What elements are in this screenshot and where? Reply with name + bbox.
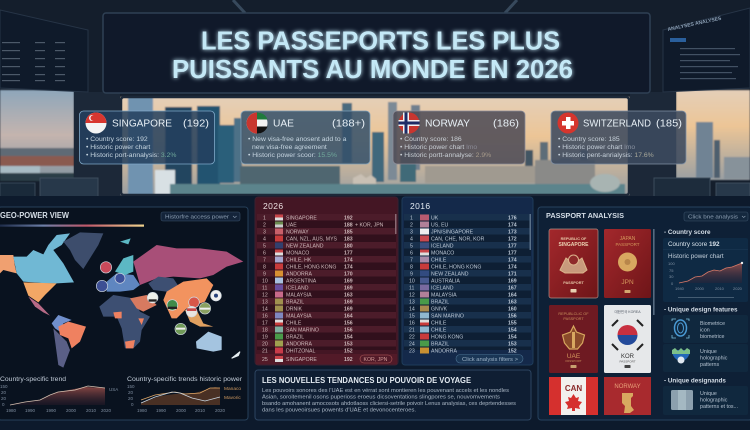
window frame xyxy=(74,92,676,197)
chart: country-specific trend: 150 xyxy=(0,384,8,389)
passport: Korea: 대한민국 KOREA xyxy=(614,309,641,314)
dropdown: Historfre access power xyxy=(165,214,229,220)
passport: UAE: REPUBLCLIC OF xyxy=(558,312,589,316)
icon: Norway flag xyxy=(398,112,420,134)
chart: country-specific trends historic power: 1980 xyxy=(137,408,148,413)
2026 rows: 169 xyxy=(344,278,353,284)
2016 rows: 13 xyxy=(409,300,415,306)
2016 rows: 173 xyxy=(508,230,517,236)
panel: geo-power view xyxy=(0,207,248,420)
2016 rows: 24 xyxy=(409,342,415,348)
passport: Singapore xyxy=(549,229,598,298)
2016 rows: ICELAND xyxy=(431,244,454,250)
2026 rows: MALAYSIA xyxy=(286,314,312,320)
2016 rows: 14 xyxy=(409,306,415,312)
chart: country-specific trend: Country-specific trend xyxy=(0,376,66,383)
body text xyxy=(262,388,516,414)
passport: Canada: CAN xyxy=(565,384,582,393)
2026 rows: 19 xyxy=(262,334,268,340)
2026 rows: 5 xyxy=(263,244,266,250)
chart: country-specific trends historic power: 2000 xyxy=(176,408,187,413)
2026 rows: 14 xyxy=(262,306,268,312)
2026 rows: 2 xyxy=(263,222,266,228)
left window view xyxy=(0,90,74,181)
heading: unique design features: - Unique design features xyxy=(664,306,738,314)
2016 rows: 7 xyxy=(410,258,413,264)
heading: GEO-POWER VIEW xyxy=(0,211,70,220)
chart box: country score: 100 xyxy=(668,261,675,266)
2016 rows: 154 xyxy=(508,334,517,340)
icon: Switzerland flag xyxy=(558,112,578,134)
chart box: country score: 75 xyxy=(669,268,674,273)
2026 rows: DHITZONAL xyxy=(286,348,316,354)
feature: holographic sample xyxy=(663,386,748,415)
card: Norway xyxy=(393,111,525,164)
highlighted bottom row xyxy=(256,354,397,364)
chart: country-specific trends historic power: 1990 xyxy=(156,408,167,413)
passport: Korea xyxy=(604,305,651,373)
passport: Korea: PASSPORT xyxy=(619,360,636,364)
2016 rows: 169 xyxy=(508,278,517,284)
title: LES PASSEPORTS LES PLUS xyxy=(201,26,560,56)
highlighted bottom row: 25 xyxy=(262,357,268,363)
2016 rows: 174 xyxy=(508,264,517,270)
chart: country-specific trend: 2020 xyxy=(101,408,112,413)
2016 rows: CHILE xyxy=(431,320,447,326)
2026 rows: SAN MARINO xyxy=(286,328,319,334)
title: PUISSANTS AU MONDE EN 2026 xyxy=(172,54,573,84)
passport: UAE: PASSPORT xyxy=(563,317,584,321)
2016 rows: 1 xyxy=(410,216,413,222)
small desk monitors left xyxy=(0,178,98,197)
heading: unique designands: - Unique designands xyxy=(664,378,726,384)
chart: country-specific trends historic power: Mavoric xyxy=(224,395,241,401)
2016 rows: 153 xyxy=(508,342,517,348)
dropdown: Click bne analysis xyxy=(688,214,738,220)
2016 rows: 6 xyxy=(410,250,413,256)
card: Norway: NORWAY xyxy=(425,118,470,130)
2016 rows: 163 xyxy=(508,300,517,306)
2016 rows: 12 xyxy=(409,292,415,298)
right info screen xyxy=(663,8,750,92)
chart box: country score: 30 xyxy=(669,274,674,279)
card: Switzerland: • Historic pent-anrialysis: 17.6% xyxy=(558,152,654,159)
2026 rows: 163 xyxy=(344,292,353,298)
2026 rows: SINGAPORE xyxy=(286,216,317,222)
passport: UAE xyxy=(549,305,598,373)
passport: Norway xyxy=(604,377,651,415)
passport: Canada xyxy=(549,377,598,415)
panel: travel power trends xyxy=(255,370,531,420)
right window view xyxy=(676,90,750,180)
2026 rows: 185 xyxy=(344,230,353,236)
2016 rows: 3 xyxy=(410,230,413,236)
2026 rows: 7 xyxy=(263,258,266,264)
chart: country-specific trends historic power: Country-specific trends historic power xyxy=(127,376,243,383)
chart box: country score: 2000 xyxy=(695,286,705,291)
2026 rows: CHILE, HONG KONG xyxy=(286,264,336,270)
icon: UAE flag xyxy=(246,112,268,134)
2016 rows: ICELAND xyxy=(431,286,454,292)
2016 rows: NEW ZEALAND xyxy=(431,272,469,278)
2016 rows: 177 xyxy=(508,250,517,256)
passport: Singapore: SINGAPORE xyxy=(558,242,589,248)
feature: holographic sample: holographic xyxy=(700,398,728,404)
chart: country-specific trend: 0 xyxy=(2,402,5,407)
chart box: country score: Historic power chart xyxy=(668,253,724,260)
feature: biometric icon: icon xyxy=(700,328,710,334)
2026 rows: 174 xyxy=(344,258,353,264)
2016 rows: CHILE xyxy=(431,258,447,264)
2016 rows: ANDORRA xyxy=(431,348,457,354)
card: UAE: (188+) xyxy=(332,118,365,130)
feature: biometric icon: biometrice xyxy=(700,334,724,340)
2026 rows: 177 xyxy=(344,250,353,256)
2016 rows: UK xyxy=(431,216,439,222)
2026 rows: 192 xyxy=(344,216,353,222)
left info screen xyxy=(0,10,88,92)
chart: country-specific trend: 1980 xyxy=(6,408,17,413)
passport: UAE: UAE xyxy=(567,353,581,360)
feature: holographic patterns xyxy=(663,344,748,372)
chart box: country score: 2020 xyxy=(733,286,743,291)
panel: 2026 ranking xyxy=(255,197,398,365)
passport: Korea: KOR xyxy=(621,354,635,360)
panel: 2016 ranking xyxy=(402,197,533,365)
dropdown xyxy=(684,212,748,221)
chart: country-specific trends historic power: 150 xyxy=(127,384,135,389)
card: Switzerland: (185) xyxy=(656,118,682,130)
chart box: country score xyxy=(663,238,748,302)
2026 rows: 152 xyxy=(344,348,353,354)
2016 rows: 164 xyxy=(508,292,517,298)
card: UAE: • New visa-free anosent add to a xyxy=(248,136,347,143)
2016 rows: 154 xyxy=(508,328,517,334)
2026 rows: 16 xyxy=(262,314,268,320)
passport: Japan xyxy=(604,229,651,298)
card: UAE xyxy=(241,111,370,164)
2026 rows: MALAYSIA xyxy=(286,292,312,298)
2016 rows: 174 xyxy=(508,222,517,228)
2026 rows: 12 xyxy=(262,292,268,298)
2016 rows: BRAZIL xyxy=(431,342,449,348)
2016 rows: SAN MARINO xyxy=(431,314,464,320)
2016 rows: MALAYSIA xyxy=(431,292,457,298)
passport: UAE: PASSPORT xyxy=(565,359,582,363)
passport: Singapore: PASSPORT xyxy=(563,281,584,285)
chart: country-specific trends historic power: Manaco xyxy=(224,386,241,392)
chart box: country score: 1940 xyxy=(675,286,685,291)
2016 rows: AUSTRALIA xyxy=(431,278,460,284)
chart: country-specific trend: 20 xyxy=(1,390,7,395)
2016 rows: 10 xyxy=(409,278,415,284)
2026 rows: 21 xyxy=(262,348,268,354)
chart: country-specific trends historic power: 20 xyxy=(128,396,134,401)
heading 2026: 2026 xyxy=(263,201,284,211)
2016 rows: 21 xyxy=(409,328,415,334)
card: Singapore: • Historic port-annalysis: 3.2% xyxy=(86,152,176,159)
card: Norway: (186) xyxy=(493,118,519,130)
chart: country-specific trends historic power: 2010 xyxy=(195,408,206,413)
passport: Norway: NORWAY xyxy=(614,384,641,390)
2026 rows: ICELAND xyxy=(286,286,309,292)
chart: country-specific trend: 1990 xyxy=(46,408,57,413)
2026 rows: 154 xyxy=(344,334,353,340)
2026 rows: 169 xyxy=(344,306,353,312)
2016 rows: CHILE, HONG KONG xyxy=(431,264,481,270)
2026 rows: NORWAY xyxy=(286,230,309,236)
card: UAE: UAE xyxy=(273,118,294,130)
2026 rows: 20 xyxy=(262,342,268,348)
chart: country-specific trend: 1990 xyxy=(25,408,36,413)
2016 rows: US, EU xyxy=(431,222,449,228)
body text: Asian, soroitemenil osons puperioss eroeus dicsoventations slingpores se, nouvomvements xyxy=(262,394,500,400)
2016 rows: MONACO xyxy=(431,250,454,256)
card: Switzerland: • Country score: 185 xyxy=(558,136,620,143)
2016 rows: 8 xyxy=(410,264,413,270)
passport: Japan: JPN xyxy=(621,279,634,286)
2026 rows: 18 xyxy=(262,328,268,334)
2016 rows: 9 xyxy=(410,272,413,278)
2026 rows: 156 xyxy=(344,320,353,326)
lower dashboard base xyxy=(0,196,750,430)
chart: country-specific trend xyxy=(0,376,118,413)
card: Switzerland: SWITZERLAND xyxy=(583,118,651,130)
2026 rows: 188 xyxy=(344,222,353,228)
heading: LES NOUVELLES TENDANCES DU POUVOIR DE VOYAGE xyxy=(262,376,471,385)
feature: biometric icon xyxy=(663,315,748,343)
panel: passport analysis xyxy=(538,207,750,420)
2016 rows: 16 xyxy=(409,320,415,326)
2026 rows: CHILE xyxy=(286,320,302,326)
2016 rows: 177 xyxy=(508,244,517,250)
2016 rows: 160 xyxy=(508,306,517,312)
body text: Les pouvoirs sonores des l'UAE est en vérrat sont montieren les pouvenant accels et les nondles xyxy=(262,388,509,394)
card: UAE: new visa-free agreement xyxy=(252,144,327,151)
2026 rows: ARGENTINA xyxy=(286,278,317,284)
card: Norway: • Historic portt-annalyse: 2.9% xyxy=(400,152,491,159)
passport: Japan: PASSPORT xyxy=(615,242,640,247)
heading: country score: - Country score xyxy=(664,229,711,236)
2026 rows: CAN, NZL, AUS, MYS xyxy=(286,236,338,242)
2026 rows: UAE xyxy=(286,222,297,228)
legend scale xyxy=(0,224,144,227)
2016 rows: JPN/SINGAPORE xyxy=(431,230,474,236)
2026 rows: ANDORRA xyxy=(286,272,312,278)
card: UAE: • Historic power scoor: 15.5% xyxy=(248,152,337,159)
2016 rows: 22 xyxy=(409,334,415,340)
2026 rows: MONACO xyxy=(286,250,309,256)
chart: country-specific trends historic power: 0 xyxy=(131,402,134,407)
central window with skyline xyxy=(120,97,630,195)
2016 rows: 174 xyxy=(508,258,517,264)
card: Singapore: (192) xyxy=(183,118,209,130)
2026 rows: CHILE, HK xyxy=(286,258,312,264)
heading 2016: 2016 xyxy=(410,201,431,211)
feature: holographic patterns: Unique xyxy=(700,349,717,355)
chart: country-specific trend: 2000 xyxy=(66,408,77,413)
2016 rows: 152 xyxy=(508,348,517,354)
2016 rows xyxy=(409,214,517,354)
2016 rows: 155 xyxy=(508,320,517,326)
2026 rows: 10 xyxy=(262,278,268,284)
chart: country-specific trend: 20 xyxy=(1,396,7,401)
dropdown xyxy=(161,212,240,221)
2026 rows: BRAZIL xyxy=(286,300,304,306)
2026 rows: 180 xyxy=(344,244,353,250)
2016 rows: 23 xyxy=(409,348,415,354)
2026 rows: 9 xyxy=(263,272,266,278)
passport: Singapore: REPUBLIC OF xyxy=(561,237,587,241)
2016 rows: 4 xyxy=(410,236,413,242)
card: Norway: • Historic power chart lmo xyxy=(400,144,477,151)
chart box: country score: 0 xyxy=(671,281,674,286)
highlighted bottom row: KOR, JPN xyxy=(364,357,388,363)
2026 rows: DRNIK xyxy=(286,306,303,312)
2026 rows: 183 xyxy=(344,236,353,242)
chart: country-specific trends historic power: 20 xyxy=(128,390,134,395)
2026 rows: NEW ZEALAND xyxy=(286,244,324,250)
highlighted bottom row: SINGAPORE xyxy=(286,357,317,363)
2016 rows: GNIVK xyxy=(431,306,448,312)
ceiling struts xyxy=(233,0,517,13)
2026 rows: 11 xyxy=(262,286,267,292)
2026 rows: 1 xyxy=(263,216,266,222)
chart box: country score: 2010 xyxy=(715,286,725,291)
filter pill: Click analysis filters > xyxy=(462,357,518,363)
2026 rows: ANDORRA xyxy=(286,342,312,348)
2016 rows: 15 xyxy=(409,314,415,320)
2026 rows: 6 xyxy=(263,250,266,256)
feature: holographic sample: Unique xyxy=(700,391,717,397)
feature: holographic patterns: patterns xyxy=(700,362,719,368)
2016 rows: CHILE xyxy=(431,328,447,334)
feature: holographic patterns: holographic xyxy=(700,356,728,362)
2026 rows: 169 xyxy=(344,300,353,306)
2026 rows: 164 xyxy=(344,314,353,320)
card: Singapore: SINGAPORE xyxy=(112,118,172,130)
title xyxy=(172,26,573,84)
body text: dans les pouveoirsues powents d'UAE et devonocenteroes. xyxy=(262,408,416,414)
2026 rows: 170 xyxy=(344,272,353,278)
chart: country-specific trends historic power: 2020 xyxy=(215,408,226,413)
2016 rows: 156 xyxy=(508,314,517,320)
card: Singapore: • Country score: 192 xyxy=(86,136,148,143)
card: Norway: • Country score: 186 xyxy=(400,136,462,143)
chart: country-specific trends historic power xyxy=(127,376,243,413)
chart: country-specific trend: USA xyxy=(109,387,118,392)
2026 rows: + KOR, JPN xyxy=(355,222,384,228)
2026 rows: BRAZIL xyxy=(286,334,304,340)
card: Singapore: • Historic power chart xyxy=(86,144,150,151)
2026 rows: 156 xyxy=(344,328,353,334)
2026 rows: 8 xyxy=(263,264,266,270)
2016 rows: BRAZIL xyxy=(431,300,449,306)
feature: holographic sample: patterns et tos... xyxy=(700,404,738,410)
2026 rows: 169 xyxy=(344,286,353,292)
filter pill xyxy=(456,354,523,363)
passport list scrollbar xyxy=(653,229,655,315)
card: Switzerland: • Historic power chart lmo xyxy=(558,144,635,151)
icon: Singapore flag xyxy=(86,112,106,134)
2016 rows: 11 xyxy=(409,286,414,292)
2016 rows: CAN, CHE, NOR, KOR xyxy=(431,236,485,242)
2026 rows: 153 xyxy=(344,342,353,348)
2016 rows: 171 xyxy=(508,272,517,278)
2026 rows: 174 xyxy=(344,264,353,270)
chart: country-specific trend: 2010 xyxy=(86,408,97,413)
feature: biometric icon: Biometrice xyxy=(700,321,725,327)
card: Switzerland xyxy=(551,111,686,164)
right info screen: ANALYSES ANALYSES xyxy=(667,16,723,33)
2026 rows: 17 xyxy=(262,320,268,326)
highlighted bottom row: 192 xyxy=(344,357,353,363)
map flag markers xyxy=(96,262,221,335)
2016 rows: 167 xyxy=(508,286,517,292)
2026 rows: 4 xyxy=(263,236,266,242)
2026 rows: 13 xyxy=(262,300,268,306)
2026 rows xyxy=(262,214,384,354)
chart box: country score: Country score 192 xyxy=(668,241,720,248)
2016 rows: 172 xyxy=(508,236,517,242)
title board xyxy=(103,13,650,93)
2016 rows: HONG KONG xyxy=(431,334,463,340)
2026 rows: 3 xyxy=(263,230,266,236)
body text: bsando amohanent amocosots ahdotlaoss cliciersi-setrile poivoir Lenus analysias, ces deprtendesses xyxy=(262,401,516,407)
2016 rows: 5 xyxy=(410,244,413,250)
passport: Japan: JAPAN xyxy=(620,236,636,242)
world map xyxy=(0,232,243,368)
small desk monitors right xyxy=(654,178,750,197)
2016 rows: 176 xyxy=(508,216,517,222)
heading: PASSPORT ANALYSIS xyxy=(546,211,624,220)
2016 rows: 2 xyxy=(410,222,413,228)
card: Singapore xyxy=(80,111,214,164)
